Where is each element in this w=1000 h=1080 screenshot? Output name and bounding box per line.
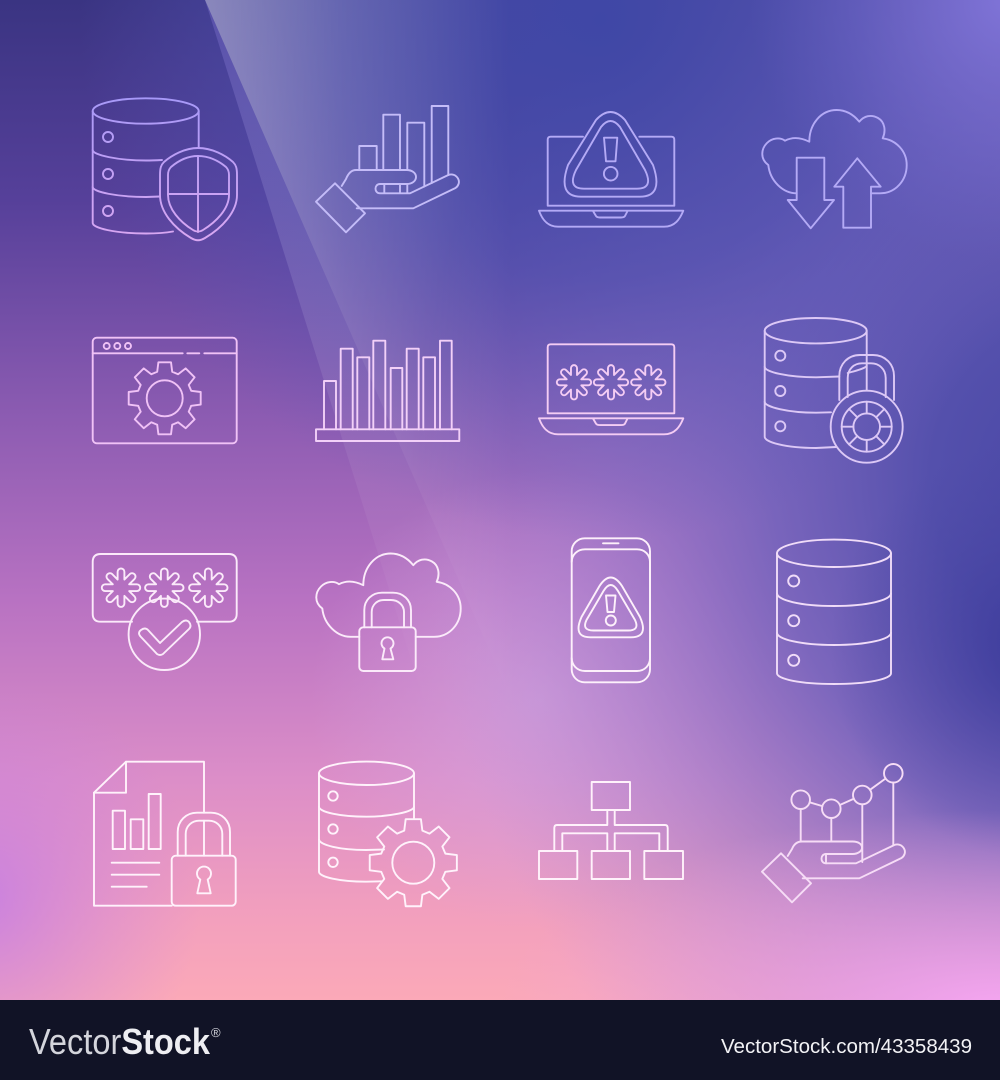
icon: database with gear [319, 762, 457, 906]
icon: cloud with upload and download arrows [762, 110, 907, 228]
icon: laptop with password asterisks [539, 344, 683, 434]
icon: document with chart and padlock [94, 762, 236, 906]
icon: smartphone with warning triangle [572, 538, 650, 682]
icon: browser window with gear [93, 338, 237, 443]
icon: laptop with warning triangle [539, 112, 683, 227]
icon: cloud with padlock [316, 554, 461, 671]
icon: database with combination lock [765, 318, 903, 463]
icon: password field with check mark [93, 554, 237, 670]
icon: hand holding bar chart [316, 106, 459, 232]
icon: hand holding line graph [762, 764, 905, 902]
icon: bar chart [316, 341, 459, 441]
icon: database with shield [93, 98, 237, 240]
icon: hierarchy chart [539, 782, 683, 879]
icon: database [777, 540, 891, 684]
VectorStock logo: VectorStock [29, 1021, 211, 1062]
footer bar [0, 1000, 1000, 1080]
image reference URL: VectorStock.com/43358439 [721, 1036, 972, 1058]
registered mark: ® [211, 1025, 221, 1040]
